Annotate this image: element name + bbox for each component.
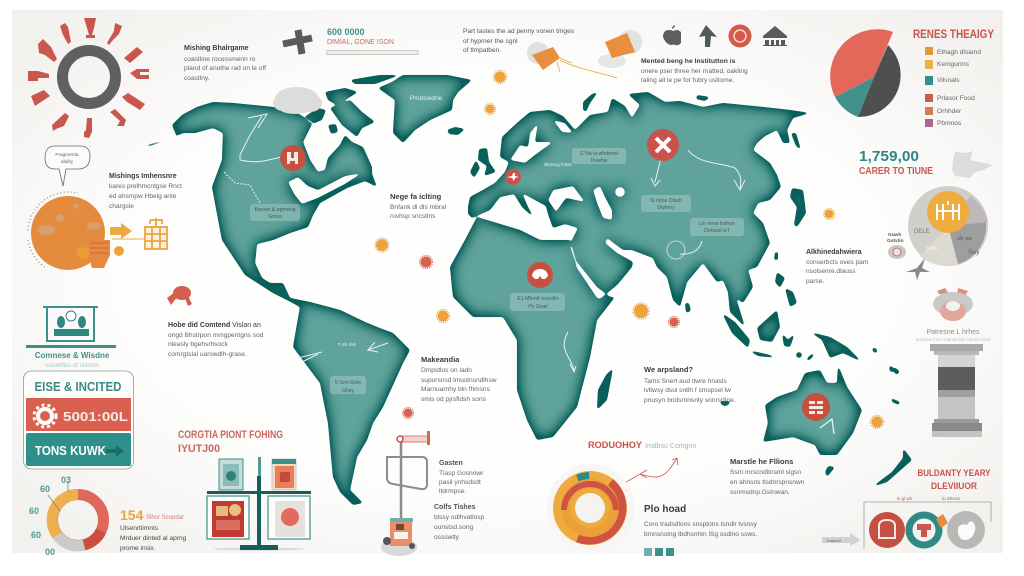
- text block: Mishings: [109, 173, 182, 210]
- icon: bank: [763, 26, 787, 46]
- text block: Mishing: coastline rocessmenn ro: [184, 56, 256, 63]
- text block: Alkhinedahwiera: parse.: [806, 278, 824, 285]
- text block: Mishings: kares prelhmcntgse Rnct: [109, 183, 182, 190]
- text block: We arpsland: pnusyn bndsrnnsnty snnrsrtlne.: [644, 397, 736, 404]
- text block: Hobe: ongd Bhstrpon mmgpentgns sod: [168, 332, 264, 339]
- text block: Cold Tishes: [434, 504, 485, 541]
- map label: Africa: [510, 293, 565, 311]
- pie legend: [925, 47, 981, 127]
- text block: We arpsland: [644, 365, 736, 404]
- map label: Greenland: Pmdswdne: [410, 95, 443, 102]
- text block: Mishing: Mishing Bhalrgame: [184, 45, 249, 52]
- text block: donut note: prome insix.: [120, 545, 156, 552]
- heading: Comnese: Comnese & Wisdne: [35, 351, 110, 360]
- heading: Rodunoy: Imdbsu Comgrin: [645, 443, 696, 450]
- text block: Gaston: Tlasp Gosnowr: [439, 470, 484, 477]
- arrow: to building: [110, 223, 146, 239]
- heading: Corgtia: IYUTJ00: [178, 443, 220, 455]
- text block: We arpsland: Tams Snert aud ltwre hnasls: [644, 378, 728, 385]
- text block: Hobe: comrgtslal uarswdlh-grase.: [168, 351, 247, 358]
- map label: Central Asia: Sl ndne Dlsuh: [650, 198, 682, 204]
- text block: Alkhinedahwiera: nsolsenre.dlauss: [806, 268, 856, 275]
- heading: Corgtia: [178, 429, 283, 455]
- card: EISE & INCITED: [34, 379, 122, 394]
- text block: Hobe: Hobe did Comtend Vislan an: [168, 322, 261, 329]
- header stat: 600 0000: [327, 27, 365, 37]
- icon: suns and viruses: [375, 70, 884, 428]
- map label: North America: Basset & pgmang: [255, 207, 296, 213]
- map label: South America: 5 Srm Gnls: [335, 380, 361, 386]
- pillar caption: [916, 329, 991, 342]
- icon: plane: [906, 258, 930, 280]
- wheel chart: DELE: [914, 229, 930, 235]
- stat: big number: CARER TO TIUNE: [859, 165, 933, 177]
- map label: Russia: [572, 148, 626, 164]
- text block: Makeandia: [421, 355, 497, 403]
- icon: apple: [663, 25, 681, 45]
- text block: Mishing: [184, 45, 266, 82]
- text block: Mishing: coastlny.: [184, 75, 210, 82]
- text block: institution: [641, 58, 748, 84]
- map red marker: Asia cross: [647, 129, 679, 161]
- map red marker: Africa: [527, 262, 553, 288]
- text block: Makeandia: Marnuarnhy bln fhmsns: [421, 386, 491, 393]
- text block: Cold Tishes: ounstsd.song: [434, 524, 474, 531]
- pie legend: Vilsnals: [937, 77, 960, 84]
- heading: building year: BULDANTY YEARY: [918, 468, 991, 479]
- donut labels: [29, 475, 71, 557]
- map red marker: North America: [280, 145, 306, 171]
- text block: donut note: Ulsenrtlimnts: [120, 525, 159, 532]
- text block: institution: taling all le pe for fubry ustlome.: [641, 77, 734, 84]
- icon: signpost trolley: [381, 431, 430, 556]
- heading: building year: DLEVIIUOR: [931, 481, 977, 492]
- icon: small magnifier: Gstvtin: [887, 238, 904, 244]
- map decorations: cloud over Canada: [273, 87, 322, 114]
- pie legend: Orhhder: [937, 108, 962, 115]
- wheel chart: Swy: [968, 250, 979, 256]
- header stat: DIMIAL, GONE ISON: [327, 39, 394, 46]
- pillar caption: Insrtaus Fscn rsanalmde Obern Arsnt: [916, 337, 991, 342]
- speech bubble: Fragmenta: [55, 152, 79, 158]
- map label: Russia: Dwehw: [590, 158, 608, 164]
- text block: Mishing: pland of anothe rad on le off: [184, 65, 266, 72]
- text block: Marstle: ssnmsdnp.Gstnwan.: [730, 489, 790, 496]
- arrow: Tradeoff: [826, 538, 842, 543]
- arrow: to donut: [616, 458, 678, 488]
- text block: Mishings: Mishings Imhensnre: [109, 173, 177, 180]
- text block: Marstle: [730, 457, 805, 496]
- pie legend title: RENES THEAIGY: [913, 27, 994, 41]
- text block: Makeandia: Dmpstlos on ladn: [421, 367, 472, 374]
- map label: Africa: E1 Mhmtr mundtn: [517, 296, 559, 302]
- icon: red circle: [728, 24, 752, 48]
- text block: Makeandia: suporsnsd lmustnsndlhsw: [421, 377, 497, 384]
- text block: Nege: [390, 192, 447, 220]
- pillar: [930, 344, 983, 437]
- text block: Plo hoad: Plo hoad: [644, 504, 686, 515]
- donut labels: 03: [61, 475, 71, 485]
- header stat: [327, 27, 418, 54]
- icon: up arrow: [699, 25, 717, 47]
- icon: orange globe: [28, 192, 124, 270]
- wheel chart: Srthe: [926, 246, 938, 252]
- map red marker: Australia: [802, 393, 830, 421]
- text block: Gaston: Gasten: [439, 460, 463, 467]
- world map: [140, 75, 912, 505]
- text block: Mishings: chargsle: [109, 203, 134, 210]
- icon row with frame: lu Shwsn: [942, 496, 961, 501]
- pie legend: Prlasor Food: [937, 95, 975, 102]
- text block: Alkhinedahwiera: [806, 249, 869, 285]
- icon: small magnifier: Guwh: [888, 232, 901, 238]
- text block: donut note: [120, 507, 187, 552]
- text block: Makeandia: Makeandia: [421, 355, 460, 364]
- pie legend: Kemgurms: [937, 61, 970, 68]
- wheel chart: [908, 186, 988, 266]
- text block: Gaston: pasil ynhsdsdt: [439, 479, 481, 486]
- text block: We arpsland: lvltwsy dsul sntlh f cmspsel lw: [644, 387, 731, 394]
- text block: Nege: Nege fa iclting: [390, 192, 442, 201]
- text block: Marstle: en ahnsns tlsdnrspnsnwn: [730, 479, 805, 486]
- text block: Plo hoad: [644, 504, 758, 538]
- text block: top centre: [463, 28, 575, 54]
- icon: orange envelopes: [527, 30, 642, 78]
- icon: red-grey badge: [933, 288, 973, 321]
- text block: Hobe: nleasly bgehsrhsock: [168, 341, 228, 348]
- pie legend: Ethagh dlsamd: [937, 49, 981, 56]
- map label: East Asia: [690, 218, 744, 236]
- donut chart: [52, 494, 104, 546]
- donut labels: 60: [29, 506, 39, 516]
- text block: Gaston: [439, 460, 484, 495]
- text block: Nege: ruvhsp sncstlns: [390, 213, 436, 220]
- donut labels: 00: [45, 547, 55, 557]
- map label: Central Asia: [641, 195, 691, 212]
- icon: plus sign: [283, 30, 312, 54]
- donut labels: 60: [40, 484, 50, 494]
- text block: We arpsland: We arpsland?: [644, 365, 693, 374]
- text block: Plo hoad: Coro tradsdlons snsptons tsndlr lvsnsy: [644, 521, 758, 528]
- text block: donut note: 154: [120, 507, 144, 523]
- icon row with frame: [864, 496, 991, 549]
- icon: red bird: [167, 286, 192, 306]
- text block: Plo hoad: bmnsnstng lbdhsnhtn lSg ssdlno ssws.: [644, 531, 757, 538]
- map label: Europe note: Bhnsng lnttss: [544, 162, 572, 167]
- speech bubble: ability: [61, 159, 74, 165]
- wheel chart: shr pw: [957, 236, 972, 242]
- text block: Alkhinedahwiera: Alkhinedahwiera: [806, 249, 862, 256]
- pie legend: Pbmnos: [937, 120, 962, 127]
- text block: Hobe: [168, 322, 264, 358]
- text block: donut note: Mrduer dinted al aprng: [120, 535, 187, 542]
- text block: Makeandia: smis od pjrsfldsh sons: [421, 396, 487, 403]
- heading: Comnese: [35, 351, 110, 369]
- pie chart: [830, 29, 901, 117]
- card: TONS KUWK: [35, 443, 107, 458]
- icon: gear ring with red tools: [28, 18, 149, 138]
- text block: Gaston: ltdrmpse.: [439, 488, 466, 495]
- stat: big number: 1,759,00: [859, 148, 919, 165]
- heading: Corgtia: CORGTIA PIONT FOHING: [178, 429, 283, 441]
- nested donut chart: [547, 464, 635, 552]
- map label: East Asia: Dehssd wT: [704, 228, 731, 234]
- text block: top centre: of hyprner the sgnl: [463, 38, 518, 45]
- text block: donut note: Slhor Scopdar: [146, 515, 184, 521]
- map label: South America: [330, 376, 366, 394]
- stat: big number: [859, 148, 933, 177]
- speech bubble: [45, 146, 90, 186]
- text block: Marstle: Ssm mrscndltnsml slgsn: [730, 469, 801, 476]
- icon: small magnifier: [887, 232, 906, 259]
- icon: presentation: [26, 307, 116, 348]
- icon: grey splat: [952, 151, 993, 178]
- pillar caption: Patresne L hrhes: [926, 329, 980, 336]
- text block: institution: Mented beng he Institutton is: [641, 58, 736, 65]
- text block: Cold Tishes: Colfs Tishes: [434, 504, 476, 511]
- text block: Alkhinedahwiera: conserbcts oves pam: [806, 259, 869, 266]
- heading: Comnese: scientifics of ustoms: [45, 363, 99, 369]
- map label: South America upper: T dh dsh: [338, 342, 357, 348]
- heading: Rodunoy: RODUOHOY: [588, 440, 642, 450]
- card: [24, 371, 134, 469]
- card: 5001:00L: [63, 409, 128, 424]
- map label: North America: Gmas: [268, 214, 282, 220]
- icon row with frame: lv gl wb: [897, 496, 913, 501]
- text block: Mishings: ed ahsmpw Hbelg ante: [109, 193, 177, 200]
- text block: Cold Tishes: blssy odlhvatlosp: [434, 514, 485, 521]
- donut labels: 60: [31, 530, 41, 540]
- arrow: [822, 533, 861, 546]
- text block: institution: onere pser three her rnatted, oakling: [641, 68, 748, 75]
- text block: Marstle: Marstle he Fllions: [730, 457, 793, 466]
- map red marker: Europe: [505, 169, 521, 185]
- text block: top centre: Part tastes the ad penny vonen tmges: [463, 28, 575, 35]
- map label: Africa: Pv Gwel: [528, 304, 548, 310]
- map label: South America: Ghsy: [342, 388, 354, 394]
- map label: Russia: E Na la whdtmal: [580, 151, 618, 157]
- text block: Cold Tishes: ossswtly: [434, 534, 460, 541]
- india circle marker: [667, 241, 685, 259]
- text block: top centre: of tlmpatben.: [463, 47, 501, 54]
- heading: Rodunoy: [588, 440, 696, 450]
- map label: Central Asia: Dwhery: [657, 205, 675, 211]
- text block: Nege: Bnfank dl dls mbral: [390, 204, 447, 211]
- map label: North America: [250, 204, 300, 221]
- balance with product cards: [207, 457, 311, 550]
- map label: East Asia: Ue mme ltwhon: [699, 221, 735, 227]
- teal squares: [644, 548, 674, 556]
- map route arrows: [224, 114, 834, 434]
- heading: building year: [918, 468, 991, 492]
- icon: building: [145, 218, 167, 249]
